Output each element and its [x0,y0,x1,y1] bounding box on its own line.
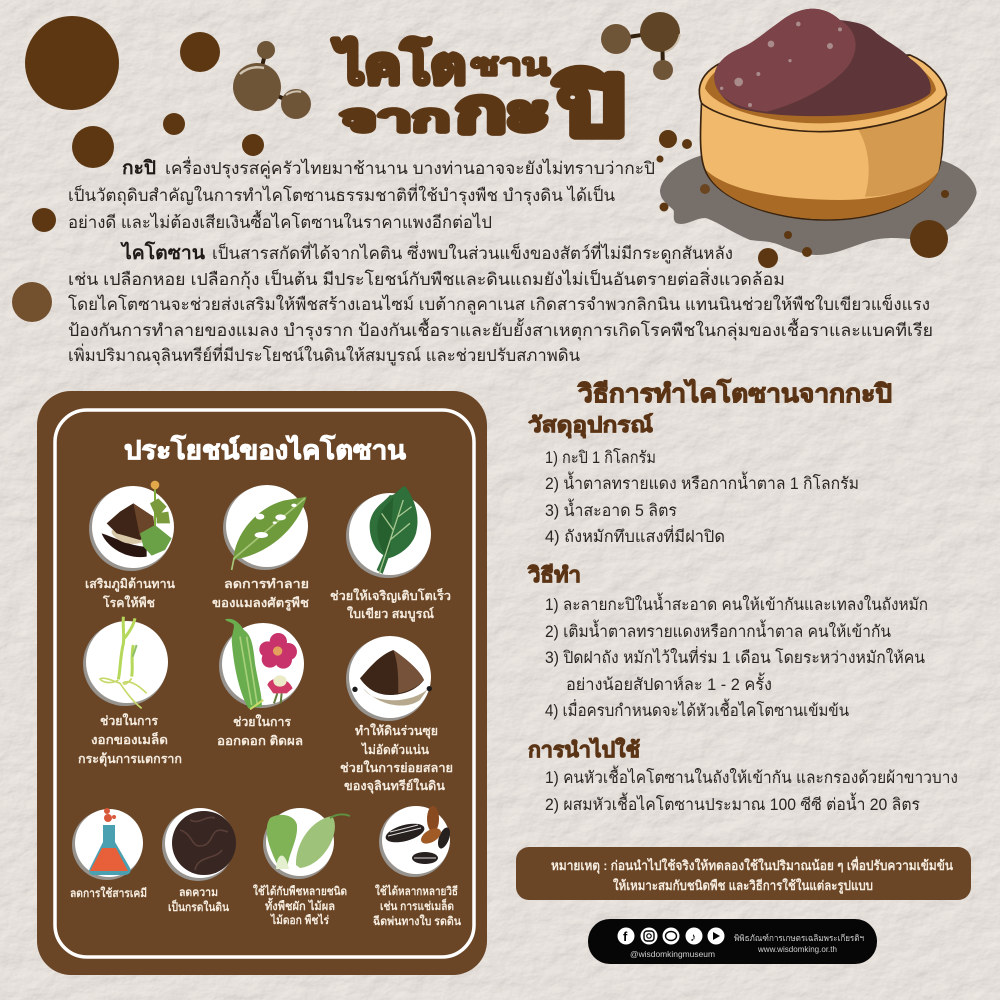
benefit: insect damage: ลดการทำลาย [224,577,309,591]
benefit: many application methods: ฉีดพ่นทางใบ รดดิน [373,914,461,928]
section: usage [528,737,958,814]
section: method: วิธีทำ [527,563,581,587]
section: method: 1) ละลายกะปิในน้ำสะอาด คนให้เข้ากันและเทลงในถังหมัก [545,592,928,614]
benefit: loose soil: ช่วยในการย่อยสลาย [340,760,453,775]
benefit: less soil acidity: เป็นกรดในดิน [168,899,229,914]
intro paragraphs: เป็นวัตถุดิบสำคัญในการทำไคโตซานธรรมชาติที่ใช้บำรุงพืช บำรุงดิน ได้เป็น [68,183,615,206]
title: ซาน [471,49,551,82]
benefit: flowering and fruiting: ช่วยในการ [233,714,291,729]
intro paragraphs: ไคโตซาน [120,241,205,264]
footer: social media pill: www.wisdomking.or.th [757,944,837,954]
intro paragraphs [68,156,933,366]
benefit: flowering and fruiting: ออกดอก ติดผล [217,734,303,748]
benefit: green leaves: ใบเขียว สมบูรณ์ [347,606,434,622]
section: usage: การนำไปใช้ [528,737,640,762]
benefit: germination: งอกของเมล็ด [91,732,168,747]
heading: how to make chitosan: วิธีการทำไคโตซานจากกะปิ [577,378,892,408]
benefit: insect damage [212,485,310,611]
title: กะ [456,79,550,144]
benefit: disease resistance [85,481,175,610]
section: materials [528,413,859,546]
icon: left molecule [233,41,311,119]
title: จาก [340,98,450,140]
benefit: disease resistance: โรคให้พืช [102,595,156,610]
decorative brown dots, right [656,130,949,268]
title: ปิ [554,62,624,151]
intro paragraphs: โดยไคโตซานจะช่วยส่งเสริมให้พืชสร้างเอนไซม์ เบต้ากลูคาเนส เกิดสารจำพวกลิกนิน แทนนินช่วยให้พืชใบเขียวแข็งแรง [68,293,930,315]
icon: right molecule [601,12,680,80]
intro paragraphs: กะปิ [122,158,156,179]
illustration: bowl of shrimp paste [660,9,977,255]
section: materials: 2) น้ำตาลทรายแดง หรือกากน้ำตาล 1 กิโลกรัม [545,471,859,493]
footer: social media pill: @wisdomkingmuseum [630,949,715,959]
benefit: disease resistance: เสริมภูมิต้านทาน [85,577,175,592]
benefit: loose soil [340,636,453,794]
callout: note [516,847,971,900]
benefit: many crops: ไม้ดอก พืชไร่ [269,913,330,927]
callout: note: หมายเหตุ : ก่อนนำไปใช้จริงให้ทดลองใช้ในปริมาณน้อย ๆ เพื่อปรับความเข้มข้น [551,856,953,874]
title [332,36,624,151]
icons: social networks: f [623,929,628,944]
section: method: 3) ปิดฝาถัง หมักไว้ในที่ร่ม 1 เดือน โดยระหว่างหมักให้คน [545,646,925,667]
intro paragraphs: เพิ่มปริมาณจุลินทรีย์ที่มีประโยชน์ในดินให้สมบูรณ์ และช่วยปรับสภาพดิน [68,343,580,366]
intro paragraphs: เช่น เปลือกหอย เปลือกกุ้ง เป็นต้น มีประโยชน์กับพืชและดินแถมยังไม่เป็นอันตรายต่อสิ่งแวดล้อม [68,267,785,290]
section: usage: 1) คนหัวเชื้อไคโตซานในถังให้เข้ากัน และกรองด้วยผ้าขาวบาง [545,765,958,787]
benefit: less soil acidity: ลดความ [179,887,218,899]
intro paragraphs: อย่างดี และไม่ต้องเสียเงินซื้อไคโตซานในราคาแพงอีกต่อไป [68,210,492,232]
section: method [527,563,928,720]
section: materials: 4) ถังหมักทึบแสงที่มีฝาปิด [545,525,725,546]
section: method: 4) เมื่อครบกำหนดจะได้หัวเชื้อไคโตซานเข้มข้น [545,698,849,720]
icons: social networks [618,928,724,944]
callout: note: ให้เหมาะสมกับชนิดพืช และวิธีการใช้ในแต่ละรูปแบบ [613,877,873,894]
title: ไคโต [332,36,466,94]
benefit: green leaves: ช่วยให้เจริญเติบโตเร็ว [330,588,451,603]
section: method: 2) เติมน้ำตาลทรายแดงหรือกากน้ำตาล คนให้เข้ากัน [545,619,891,641]
benefit: germination [78,617,182,767]
benefit: many crops: ใช้ได้กับพืชหลายชนิด [253,884,347,898]
panel: benefits of chitosan [37,391,487,975]
benefit: insect damage: ของแมลงศัตรูพืช [212,596,310,611]
benefit: many crops [253,808,350,927]
decorative brown dots, left [12,16,264,322]
benefit: germination: ช่วยในการ [100,713,158,728]
intro paragraphs: ป้องกันการทำลายของแมลง บำรุงราก ป้องกันเชื้อราและยับยั้งสาเหตุการเกิดโรคพืชในกลุ่มของเชื้อราและแบคทีเรีย [68,318,933,341]
benefit: many application methods: ใช้ได้หลากหลายวิธี [375,884,458,898]
section: materials: วัสดุอุปกรณ์ [528,413,654,439]
footer: social media pill [588,919,877,964]
benefit: loose soil: ของจุลินทรีย์ในดิน [344,778,445,794]
benefit: many application methods [373,806,461,928]
benefit: less soil acidity [162,808,236,914]
benefit: germination: กระตุ้นการแตกราก [78,752,182,767]
footer: social media pill: พิพิธภัณฑ์การเกษตรเฉลิมพระเกียรติฯ [734,933,864,943]
benefit: less chemicals [70,808,147,900]
icons: social networks: ♪ [690,930,696,944]
benefit: green leaves [330,486,451,622]
section: materials: 1) กะปิ 1 กิโลกรัม [545,448,656,467]
benefit: loose soil: ทำให้ดินร่วนซุย [355,723,438,739]
benefit: many application methods: เช่น การแช่เมล็ด [380,898,454,913]
benefit: flowering and fruiting [217,619,304,748]
section: method: อย่างน้อยสัปดาห์ละ 1 - 2 ครั้ง [566,672,772,694]
benefit: many crops: ทั้งพืชผัก ไม้ผล [265,897,335,913]
panel heading: ประโยชน์ของไคโตซาน [124,434,406,465]
benefit: less chemicals: ลดการใช้สารเคมี [70,886,147,900]
benefit: loose soil: ไม่อัดตัวแน่น [360,742,429,757]
intro paragraphs: เป็นสารสกัดที่ได้จากไคติน ซึ่งพบในส่วนแข็งของสัตว์ที่ไม่มีกระดูกสันหลัง [212,241,733,264]
section: usage: 2) ผสมหัวเชื้อไคโตซานประมาณ 100 ซีซี ต่อน้ำ 20 ลิตร [545,792,920,814]
intro paragraphs: เครื่องปรุงรสคู่ครัวไทยมาช้านาน บางท่านอาจจะยังไม่ทราบว่ากะปิ [165,156,655,179]
section: materials: 3) น้ำสะอาด 5 ลิตร [545,498,677,520]
